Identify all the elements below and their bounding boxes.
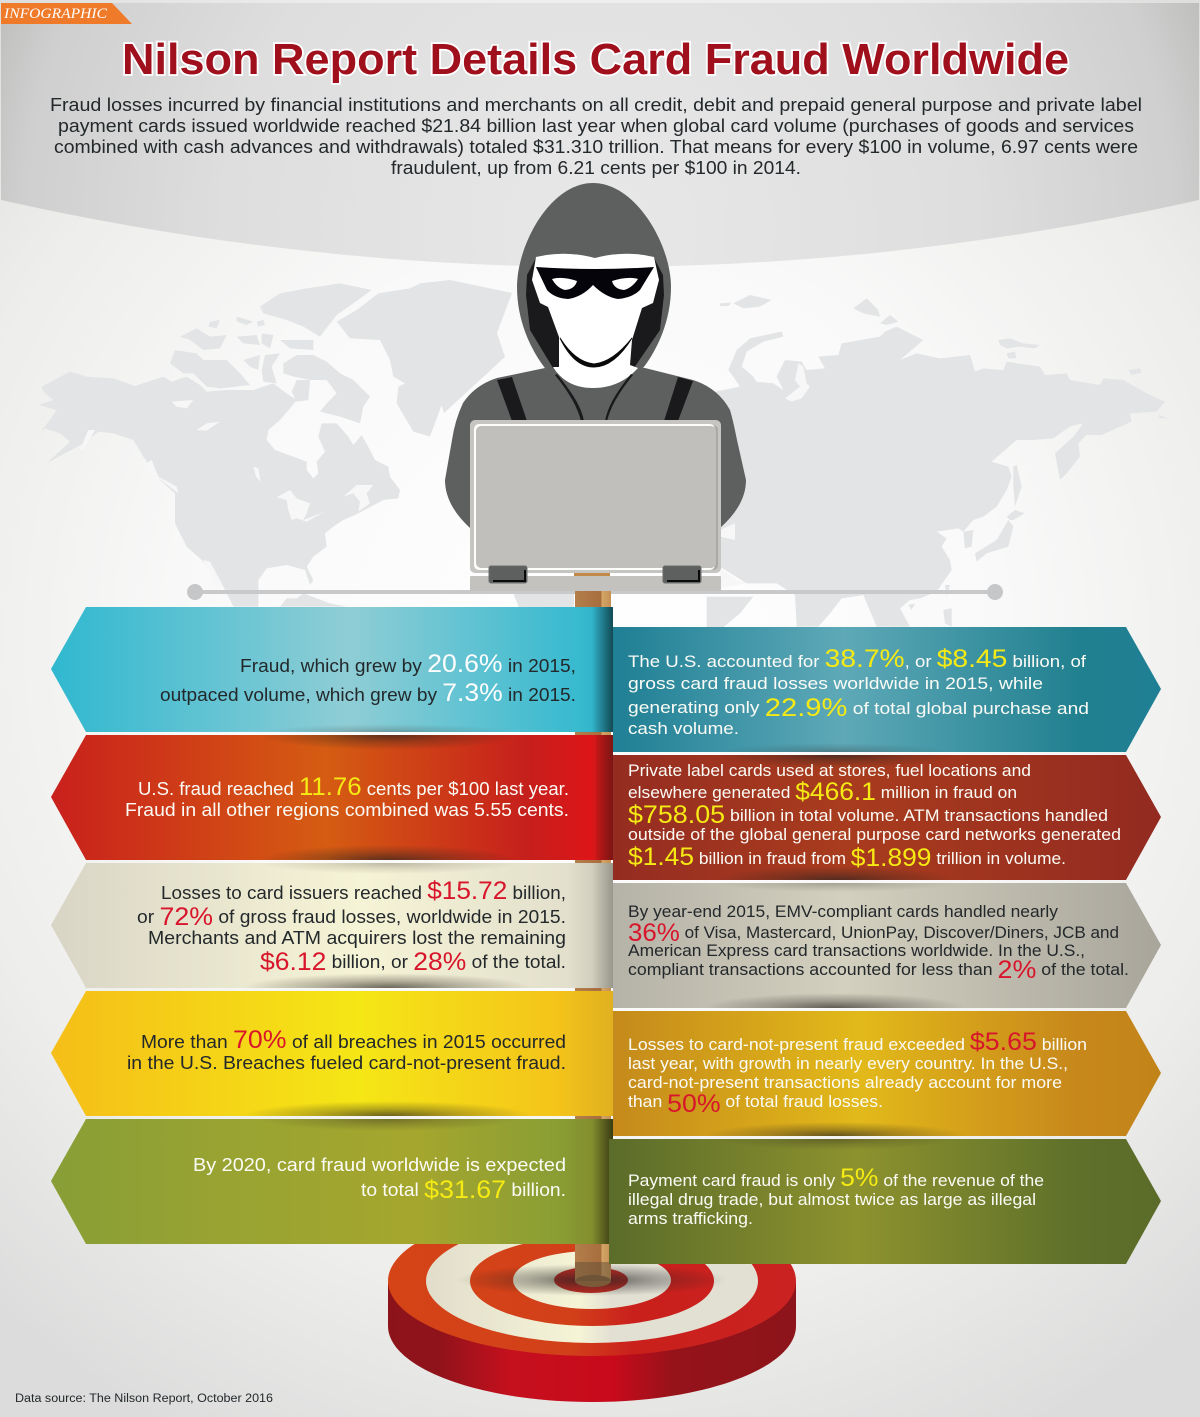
- intro paragraph: fraudulent, up from 6.21 cents per $100 in 2014.: [391, 157, 801, 178]
- mask eyes: [552, 278, 638, 290]
- banner text: [127, 1026, 566, 1073]
- mask: [536, 267, 654, 299]
- banner text: illegal drug trade, but almost twice as large as illegal: [628, 1191, 1036, 1209]
- banner text: [628, 762, 1121, 872]
- banner text: outpaced volume, which grew by 7.3% in 2015.: [160, 679, 576, 707]
- panel: right 5 drug trade comparison: [609, 1128, 1161, 1264]
- panel: left 1 fraud growth: [51, 607, 613, 742]
- banner text: Losses to card-not-present fraud exceeded $5.65 billion: [628, 1028, 1087, 1056]
- hoodie straps and strings: [497, 374, 693, 421]
- hood: [517, 183, 671, 372]
- panel: left 5 2020 forecast: [51, 1107, 613, 1244]
- panel: right 3 EMV cards: [613, 883, 1161, 1008]
- infographic tag: INFOGRAPHIC: [3, 6, 108, 22]
- banner text: billion.: [506, 1180, 566, 1200]
- banner text: 2%: [998, 956, 1036, 984]
- banner text: By 2020, card fraud worldwide is expected: [193, 1155, 566, 1175]
- target base: [388, 1206, 796, 1402]
- banner text: $758.05: [628, 801, 725, 829]
- banner text: Payment card fraud is only 5% of the revenue of the: [628, 1164, 1044, 1192]
- banner text: million in fraud on: [876, 784, 1017, 802]
- hoodie body: [445, 368, 746, 528]
- banner shape: [51, 1119, 613, 1244]
- banner text: Fraud, which grew by 20.6% in 2015,: [240, 650, 576, 678]
- banner shape: [51, 991, 613, 1116]
- intro paragraph: Fraud losses incurred by financial institutions and merchants on all credit, debit and prepaid general purpose and private label: [50, 94, 1142, 115]
- top grey dome: [1, 3, 1199, 267]
- banner shape: [51, 607, 613, 732]
- banner text: or: [137, 907, 153, 927]
- banner text: Private label cards used at stores, fuel locations and: [628, 762, 1031, 780]
- banner text: [160, 650, 576, 707]
- banner shape: [613, 627, 1161, 752]
- intro paragraph: payment cards issued worldwide reached $21.84 billion last year when global card volume (purchases of goods and services: [58, 115, 1134, 136]
- banner text: arms trafficking.: [628, 1210, 753, 1228]
- banner text: By year-end 2015, EMV-compliant cards handled nearly: [628, 903, 1059, 921]
- banner text: of total global purchase and: [847, 700, 1089, 718]
- banner text: billion in total volume. ATM transactions handled: [725, 807, 1108, 825]
- banner text: American Express card transactions worldwide. In the U.S.,: [628, 942, 1085, 960]
- panel: right 4 card-not-present: [613, 1011, 1161, 1136]
- world map backdrop: [38, 280, 1168, 630]
- banner text: $466.1: [795, 778, 876, 806]
- banner text: trillion in volume.: [931, 850, 1066, 868]
- banner text: [125, 773, 569, 820]
- banner text: 28%: [413, 948, 466, 976]
- panel: right 2 private label cards: [613, 755, 1161, 880]
- banner text: than: [628, 1093, 660, 1111]
- title: Nilson Report Details Card Fraud Worldwide: [122, 35, 1069, 84]
- banner text: of total fraud losses.: [721, 1093, 883, 1111]
- map: Africa fragment: [512, 590, 574, 610]
- banner shape: [613, 1011, 1161, 1136]
- banner shape: [51, 735, 613, 860]
- banner text: in the U.S. Breaches fueled card-not-present fraud.: [127, 1053, 566, 1073]
- banner shape: [609, 1139, 1161, 1264]
- infographic tag: [1, 3, 132, 24]
- banner text: Losses to card issuers reached $15.72 billion,: [161, 877, 566, 905]
- panel: left 4 breaches: [51, 991, 613, 1116]
- laptop hinges: [489, 566, 701, 583]
- banner text: compliant transactions accounted for less than: [628, 961, 967, 979]
- banner text: billion, or: [326, 952, 413, 972]
- banner text: last year, with growth in nearly every country. In the U.S.,: [628, 1055, 1068, 1073]
- chin line: [560, 338, 632, 367]
- banner shape: [51, 863, 613, 988]
- banner text: outside of the global general purpose card networks generated: [628, 826, 1121, 844]
- banner text: [628, 645, 1089, 738]
- banner text: Fraud in all other regions combined was 5.55 cents.: [125, 800, 569, 820]
- banner text: to total: [361, 1180, 415, 1200]
- hacker figure: [445, 183, 746, 528]
- banner text: elsewhere generated: [628, 784, 782, 802]
- banner text: of gross fraud losses, worldwide in 2015.: [213, 907, 566, 927]
- banner text: 22.9%: [765, 694, 847, 722]
- banner text: cash volume.: [628, 720, 739, 738]
- intro paragraph: [50, 94, 1142, 178]
- crossbar with end caps: [187, 584, 1003, 600]
- banner text: gross card fraud losses worldwide in 2015, while: [628, 675, 1043, 693]
- hood interior: [526, 258, 664, 368]
- panel: right 1 U.S. share: [613, 627, 1161, 761]
- data source note: Data source: The Nilson Report, October 2016: [15, 1393, 273, 1405]
- banner text: [628, 1164, 1044, 1228]
- banner text: $6.12: [260, 948, 326, 976]
- intro paragraph: combined with cash advances and withdrawals) totaled $31.310 trillion. That means for every $100 in volume, 6.97 cents were: [54, 136, 1138, 157]
- banner text: of Visa, Mastercard, UnionPay, Discover/Diners, JCB and: [680, 924, 1119, 942]
- face: [532, 254, 659, 388]
- banner text: The U.S. accounted for 38.7% , or $8.45 billion, of: [628, 645, 1086, 673]
- banner text: of the total.: [1036, 961, 1129, 979]
- laptop: [470, 420, 721, 591]
- banner text: card-not-present transactions already account for more: [628, 1074, 1062, 1092]
- banner text: More than 70% of all breaches in 2015 occurred: [141, 1026, 566, 1054]
- panel: left 2 U.S. fraud rate: [51, 735, 613, 860]
- banner text: 72%: [159, 903, 213, 931]
- banner text: [193, 1155, 566, 1204]
- banner text: generating only: [628, 699, 741, 717]
- target rings: [388, 1206, 796, 1356]
- banner shape: [613, 755, 1161, 880]
- banner text: 36%: [628, 919, 680, 947]
- banner text: 50%: [667, 1090, 721, 1118]
- target side: [388, 1283, 796, 1402]
- banner text: $1.45: [628, 843, 694, 871]
- map: Eurasia: [707, 295, 1168, 630]
- banner text: $1.899: [851, 844, 931, 872]
- signpost pole: [575, 591, 611, 1287]
- banner text: U.S. fraud reached 11.76 cents per $100 last year.: [138, 773, 569, 801]
- banner text: [137, 877, 566, 976]
- laptop lid: [470, 420, 721, 573]
- banner text: of the total.: [466, 952, 566, 972]
- laptop base: [470, 576, 721, 591]
- banner text: $31.67: [424, 1176, 506, 1204]
- banner shape: [613, 883, 1161, 1008]
- map: Americas and Greenland: [38, 280, 512, 607]
- panel: left 3 issuer losses: [51, 863, 613, 988]
- banner text: billion in fraud from: [694, 850, 851, 868]
- banner text: [628, 903, 1129, 984]
- banner text: [628, 1028, 1087, 1118]
- banner text: Merchants and ATM acquirers lost the remaining: [148, 928, 566, 948]
